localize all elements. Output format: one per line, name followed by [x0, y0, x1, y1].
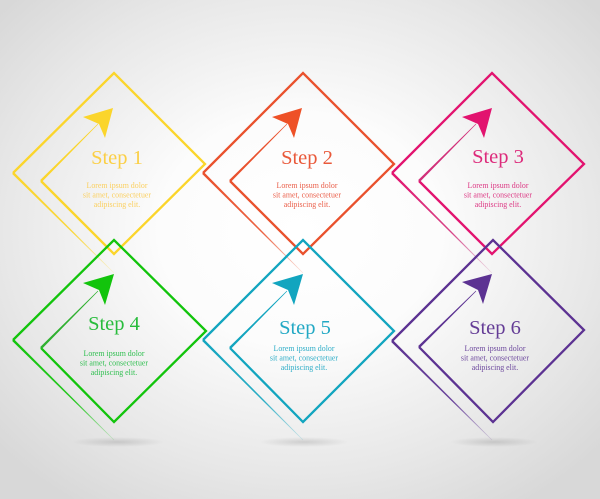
step 1 diamond: adipiscing elit. [94, 200, 140, 209]
step 4 diamond: adipiscing elit. [91, 368, 137, 377]
step 4 diamond [12, 240, 206, 440]
step 6 diamond: sit amet, consectetuer [461, 354, 529, 362]
step 2 diamond: Step 2 [281, 147, 333, 169]
step 1 diamond: sit amet, consectetuer [83, 190, 151, 200]
step 3 diamond: adipiscing elit. [475, 200, 521, 209]
step 1 diamond: Step 1 [91, 147, 143, 169]
floor shadows [71, 437, 538, 447]
step 6 diamond [391, 240, 584, 440]
step 5 diamond: adipiscing elit. [281, 363, 327, 372]
step 3 diamond: Step 3 [472, 146, 524, 168]
step 5 diamond: Lorem ipsum dolor [274, 344, 335, 353]
step 2 diamond [202, 73, 394, 273]
step 4 diamond: Lorem ipsum dolor [84, 349, 145, 358]
step 5 diamond: sit amet, consectetuer [270, 354, 338, 362]
step 2 diamond: sit amet, consectetuer [273, 190, 341, 200]
step 2 diamond: adipiscing elit. [284, 200, 330, 209]
step 5 diamond: Step 5 [279, 317, 331, 339]
step 1 diamond: Lorem ipsum dolor [87, 181, 148, 190]
step 3 diamond: sit amet, consectetuer [464, 190, 532, 200]
step 4 diamond: Step 4 [88, 313, 140, 335]
step 3 diamond: Lorem ipsum dolor [468, 181, 529, 190]
step 3 diamond [391, 73, 584, 273]
step 5 diamond [202, 240, 394, 440]
step 6 diamond: Step 6 [469, 317, 521, 339]
step 6 diamond: adipiscing elit. [472, 363, 518, 372]
step 1 diamond [12, 73, 205, 273]
step 2 diamond: Lorem ipsum dolor [277, 181, 338, 190]
step 6 diamond: Lorem ipsum dolor [465, 344, 526, 353]
step 4 diamond: sit amet, consectetuer [80, 358, 148, 368]
